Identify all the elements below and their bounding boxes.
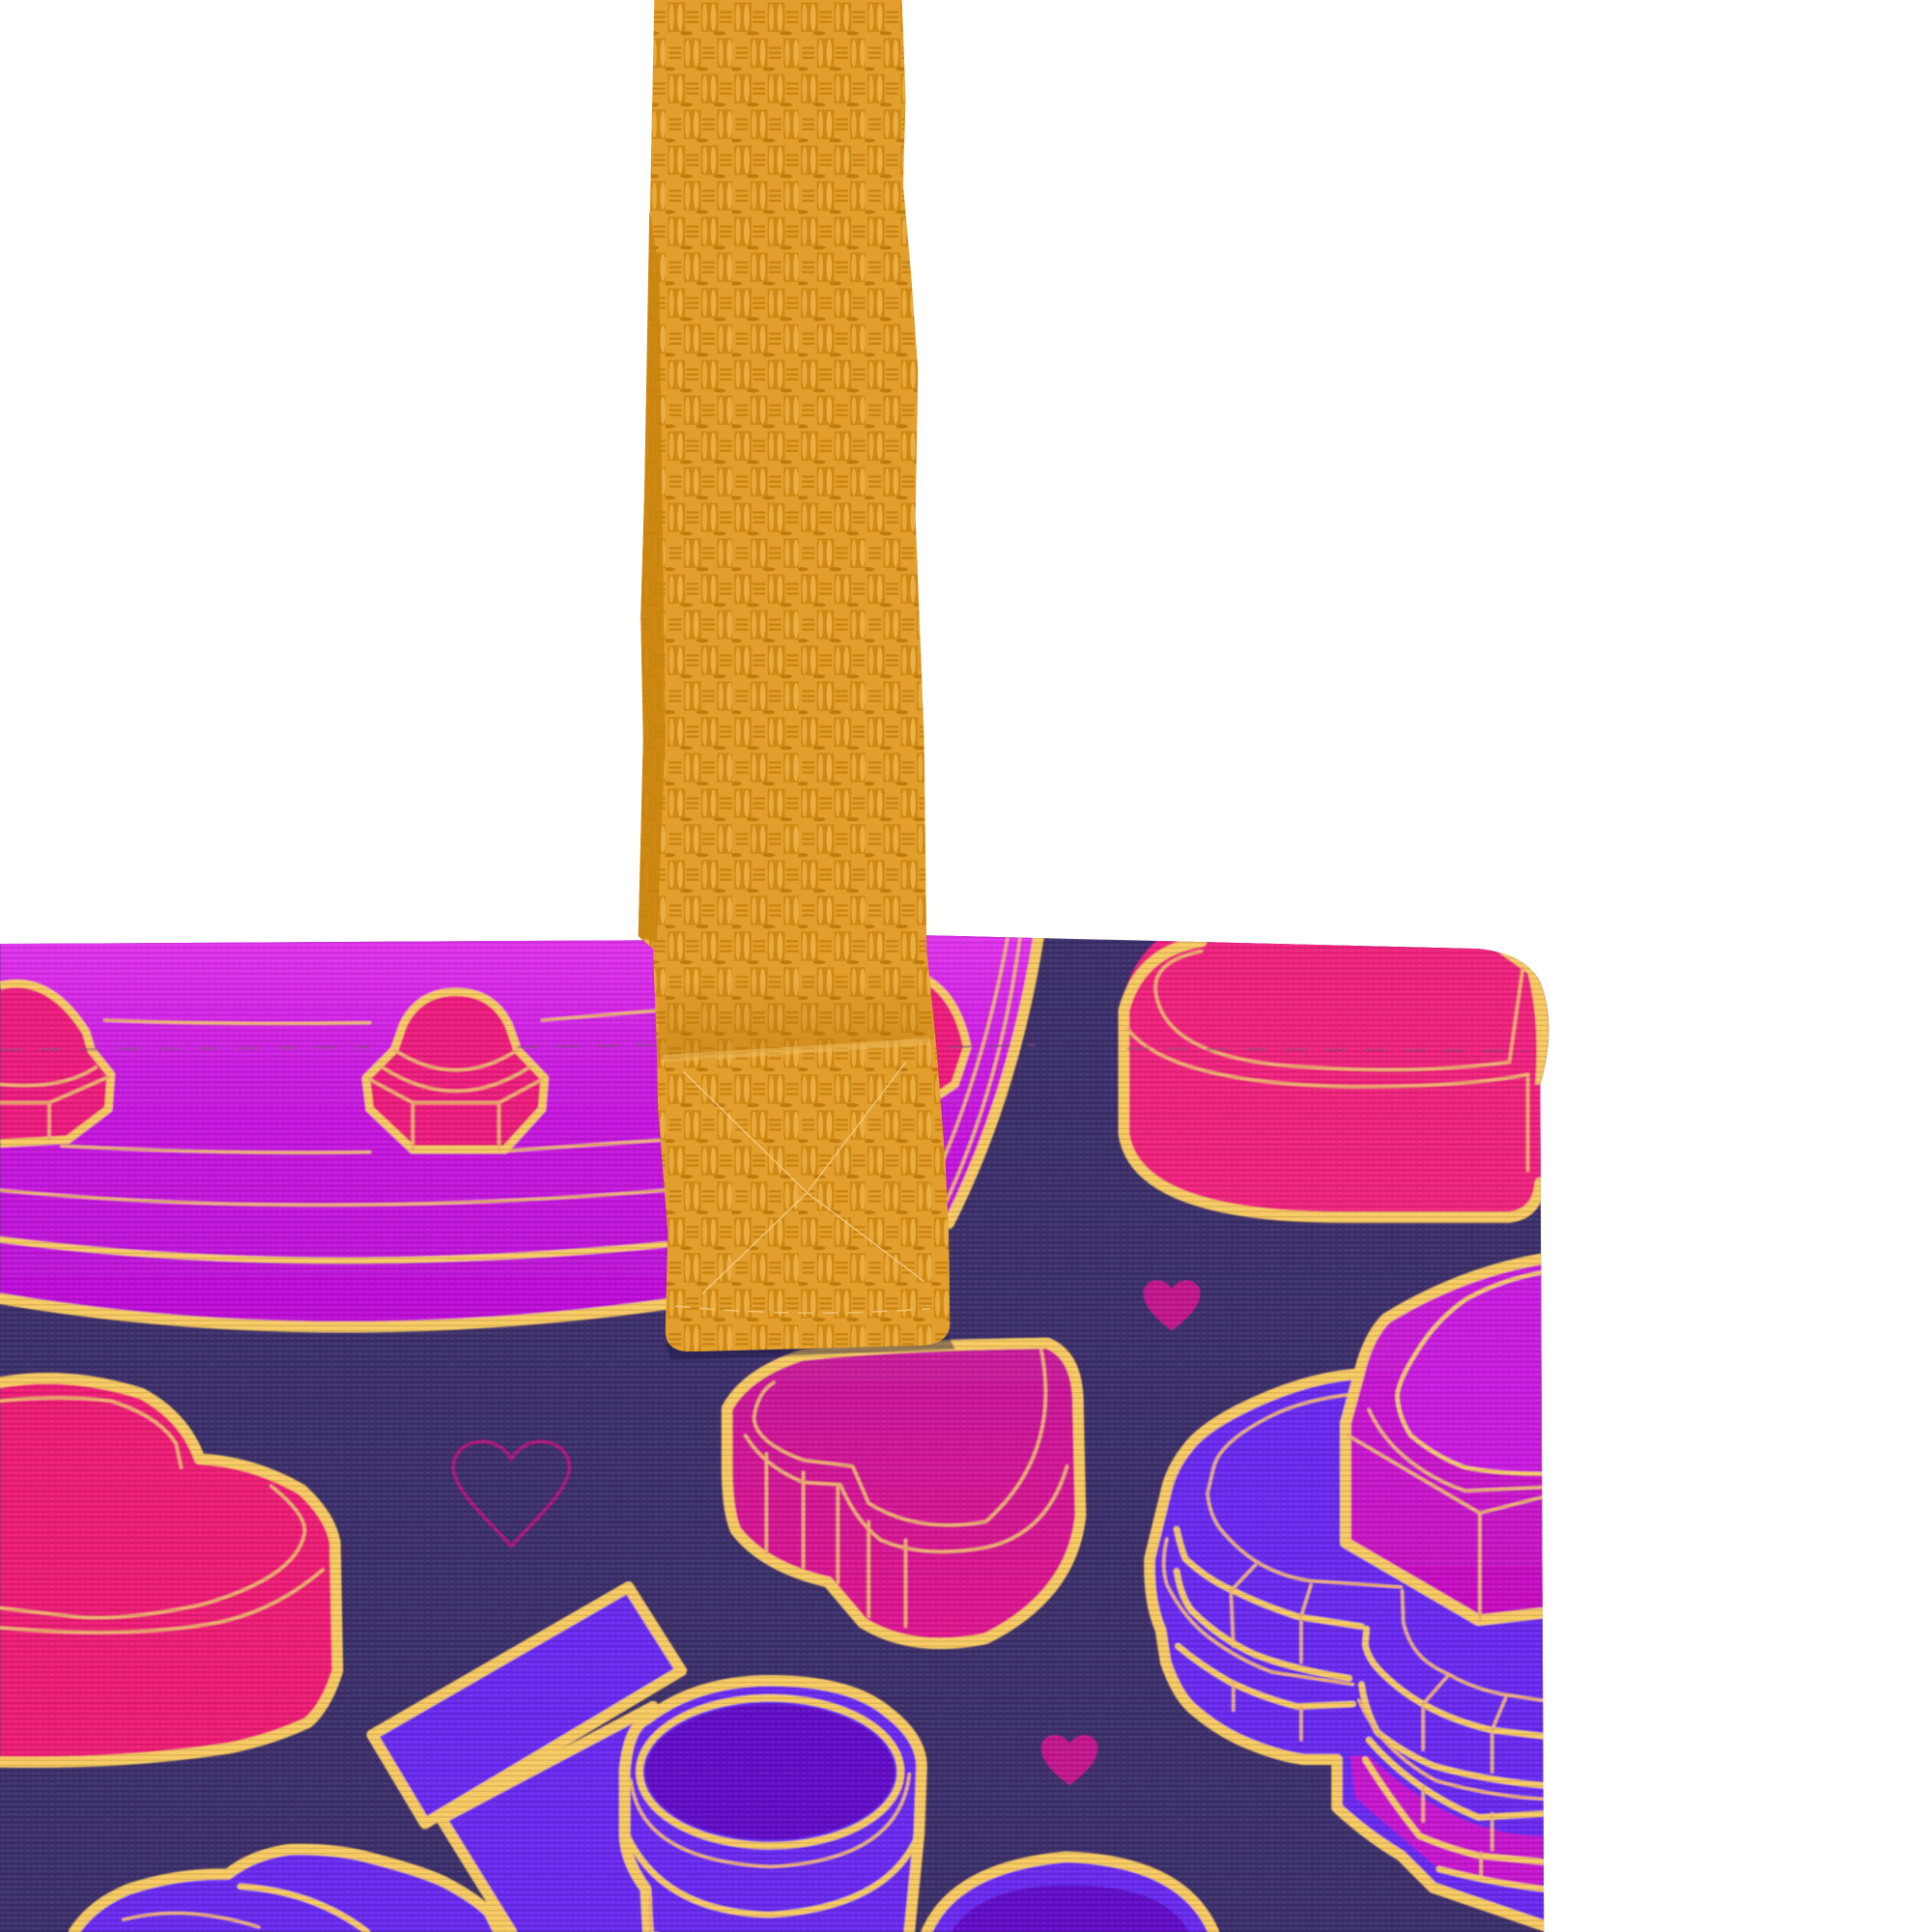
- strap X stitching: [675, 1062, 930, 1313]
- strap fold shadow: [658, 974, 934, 1060]
- outlined heart: [453, 1441, 569, 1547]
- stacked discs right: [1150, 1374, 1555, 1929]
- small filled heart bottom: [1041, 1735, 1098, 1785]
- heart-shaped block center: [727, 1343, 1081, 1643]
- fabric weave texture: [0, 937, 1548, 1932]
- hex nut right with dome: [1346, 1257, 1555, 1620]
- strap back layer shade: [639, 210, 666, 943]
- magenta base under lower disc: [1350, 1756, 1543, 1891]
- magenta band with yellow outline: [0, 930, 1045, 1327]
- strap: mustard webbing: [629, 0, 961, 1355]
- purple circle bottom center: [926, 1857, 1213, 1932]
- hex nut center: [366, 992, 545, 1150]
- strap shadow on bag: [666, 1337, 955, 1360]
- purple heart bottom left: [74, 1849, 499, 1932]
- dashed fold stitch: [0, 1045, 1528, 1051]
- hex nut left: [0, 983, 111, 1144]
- small filled heart right: [1144, 1280, 1200, 1331]
- cushion top right: [1122, 934, 1555, 1220]
- purple cylinder: [625, 1681, 922, 1932]
- purple box lid and body: [372, 1587, 681, 1932]
- strap fold line: [663, 1037, 931, 1062]
- heart-shaped block left: [0, 1378, 337, 1762]
- panel: bag fabric: [0, 935, 1549, 1932]
- hex nut right of strap: [912, 974, 967, 1109]
